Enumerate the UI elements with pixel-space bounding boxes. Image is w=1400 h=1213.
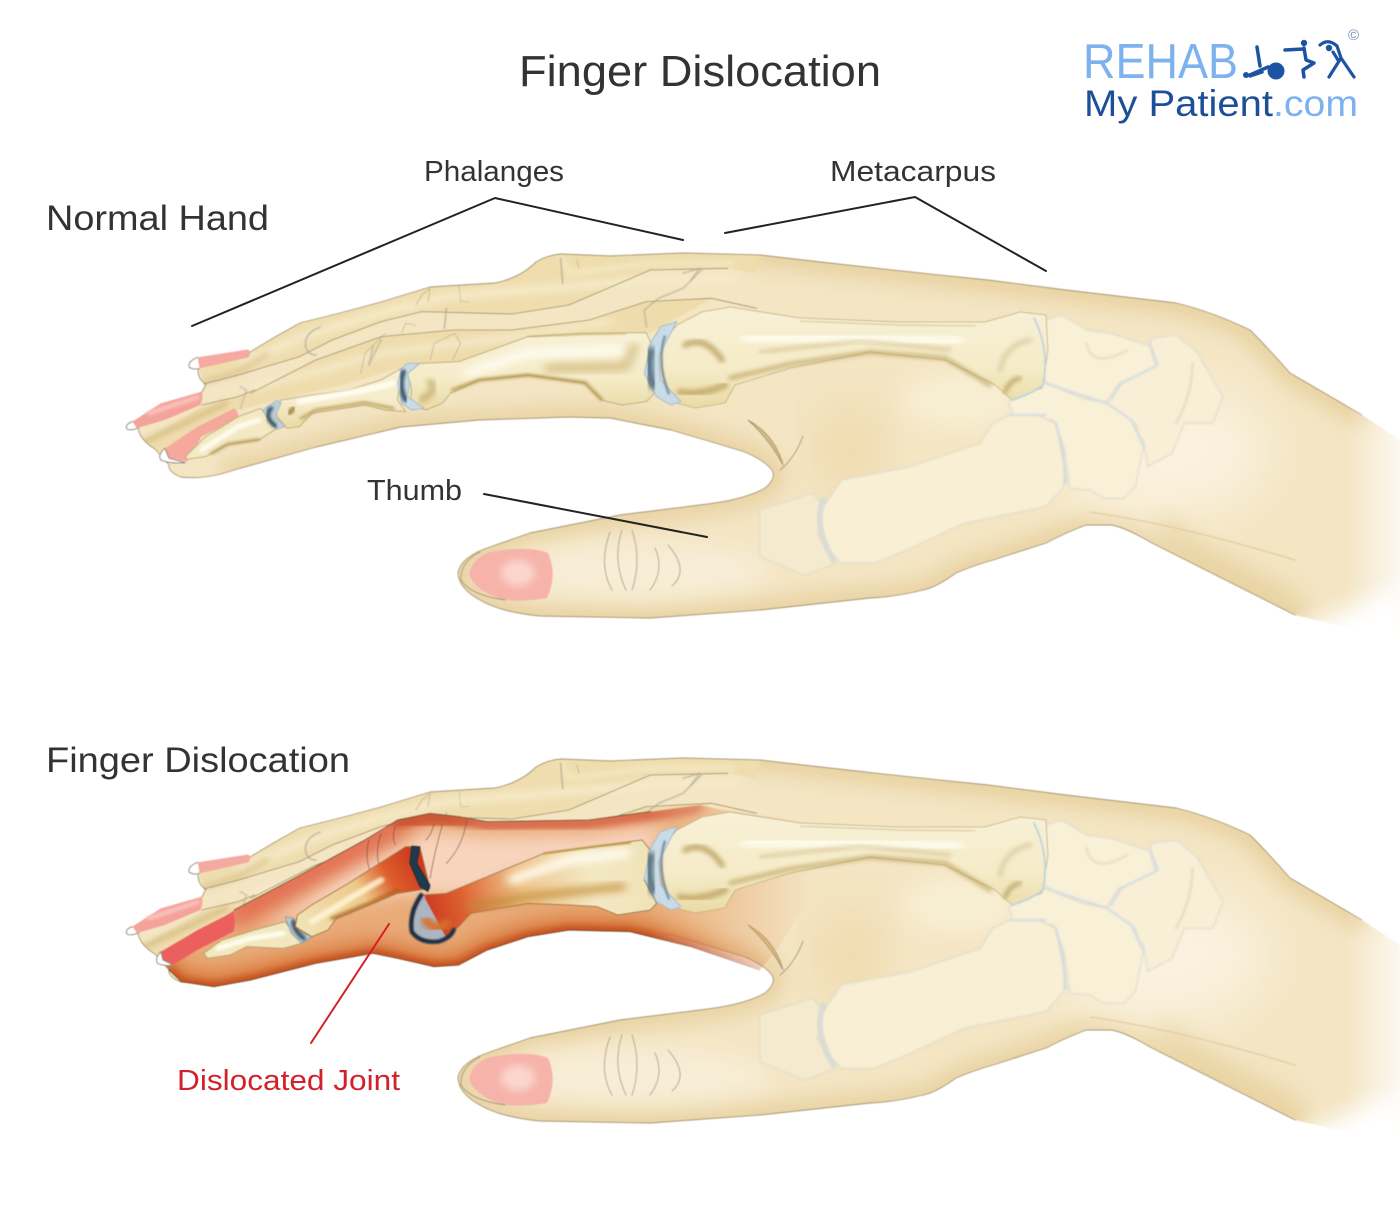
pointer: dislocated joint (311, 924, 389, 1043)
logo wordmark: © (1348, 27, 1359, 44)
title: Finger Dislocation (519, 47, 881, 96)
heading: normal hand: Normal Hand (46, 199, 269, 238)
illustration: dislocated finger hand (125, 756, 1400, 1130)
label: dislocated joint: Dislocated Joint (177, 1065, 400, 1097)
dislocated index nail (157, 912, 235, 966)
logo wordmark: .com (1273, 83, 1358, 124)
heading: finger dislocation: Finger Dislocation (46, 741, 350, 780)
index nail (160, 408, 238, 463)
pointer: thumb (484, 494, 707, 537)
dislocated finger bones (204, 840, 657, 958)
logo wordmark: REHAB (1083, 35, 1238, 89)
logo wordmark (1083, 27, 1359, 124)
logo wordmark: My Patient (1084, 83, 1274, 124)
label: phalanges: Phalanges (424, 156, 564, 188)
logo: Rehab My Patient (1083, 27, 1359, 124)
label: metacarpus: Metacarpus (830, 156, 996, 188)
logo: exercise figures (1243, 40, 1354, 80)
illustration: normal hand (126, 253, 1400, 700)
swollen red finger (161, 805, 814, 987)
label: thumb: Thumb (367, 475, 462, 507)
bracket: metacarpus (725, 197, 1046, 271)
bracket: phalanges (192, 198, 683, 326)
